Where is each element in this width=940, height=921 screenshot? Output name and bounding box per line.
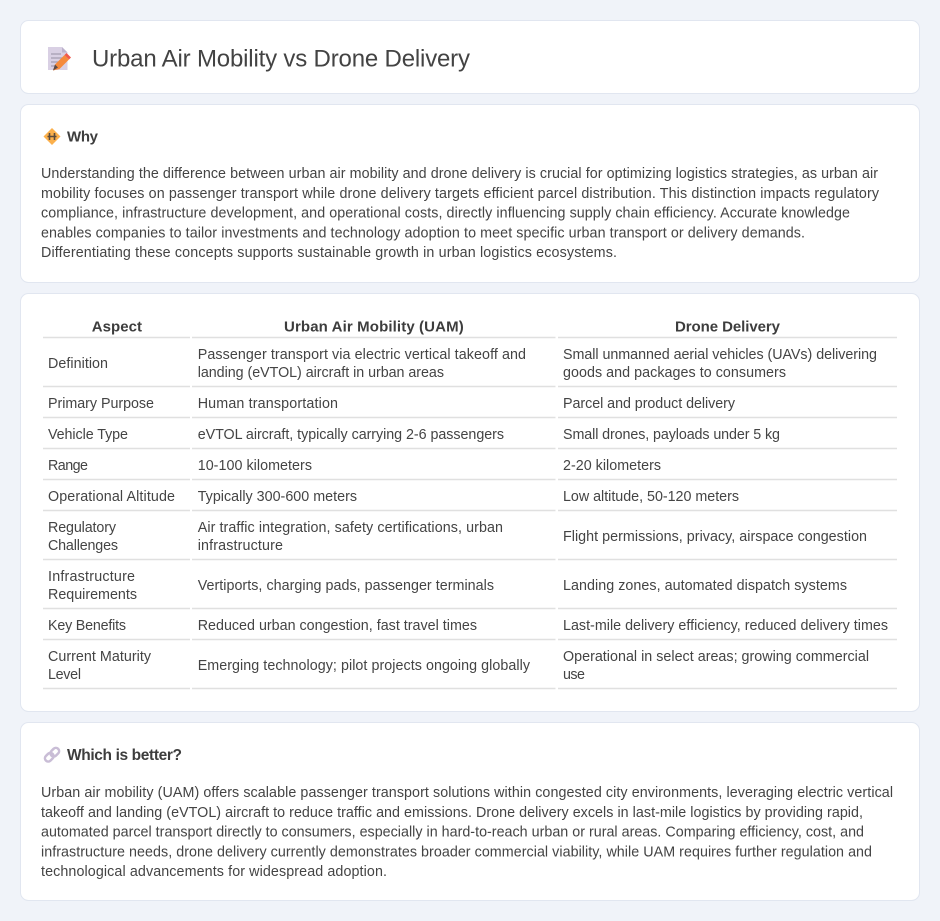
row: current maturity level: use — [563, 667, 585, 683]
text block: why: Differentiating these concepts supports sustainable growth in urban logistics ecosystems. — [41, 245, 617, 261]
row: current maturity level: Operational in select areas; growing commercial — [563, 649, 869, 665]
icon: warning diamond — [44, 128, 60, 145]
row: current maturity level: Emerging technology; pilot projects ongoing globally — [198, 658, 531, 674]
row: key benefits: Key Benefits — [48, 618, 126, 634]
row: infrastructure requirements: Infrastructure — [48, 569, 135, 585]
text block: which is better: Urban air mobility (UAM) offers scalable passenger transport solutions within congested city environments, leveraging electric vertical — [41, 785, 893, 801]
row: regulatory challenges: Air traffic integration, safety certifications, urban — [198, 520, 503, 536]
row: operational altitude: Low altitude, 50-120 meters — [563, 489, 739, 505]
panel: comparison table — [20, 294, 920, 712]
row: regulatory challenges: Challenges — [48, 538, 118, 554]
row: key benefits: Last-mile delivery efficiency, reduced delivery times — [563, 618, 888, 634]
row: range — [48, 458, 661, 474]
row: infrastructure requirements: Landing zones, automated dispatch systems — [563, 578, 847, 594]
row: regulatory challenges: infrastructure — [198, 538, 283, 554]
row: primary purpose: Primary Purpose — [48, 396, 154, 412]
row: infrastructure requirements: Vertiports, charging pads, passenger terminals — [198, 578, 494, 594]
text block: which is better: technological advancements for widespread adoption. — [41, 864, 387, 880]
row: definition: goods and packages to consumers — [563, 365, 786, 381]
row: vehicle type: Small drones, payloads under 5 kg — [563, 427, 780, 443]
row: definition: Small unmanned aerial vehicles (UAVs) delivering — [563, 347, 877, 363]
row: current maturity level — [48, 649, 869, 683]
panel: why — [20, 104, 920, 282]
row: range: 10-100 kilometers — [198, 458, 312, 474]
row: infrastructure requirements — [48, 569, 847, 603]
table header: Urban Air Mobility (UAM) — [284, 318, 464, 336]
icon: link — [44, 747, 60, 763]
row: regulatory challenges — [48, 520, 867, 554]
icon: memo with pencil — [48, 47, 71, 70]
row: operational altitude: Operational Altitude — [48, 489, 175, 505]
panel: which is better — [20, 722, 920, 900]
row: vehicle type: Vehicle Type — [48, 427, 128, 443]
row: primary purpose — [48, 396, 736, 412]
text block: which is better: automated parcel transport directly to consumers, especially in hard-to-reach urban or rural areas. Comparing efficiency, cost, and — [41, 825, 864, 841]
row: current maturity level: Level — [48, 667, 81, 683]
text block: why: enables companies to tailor investments and technology adoption to meet specific urban transport or delivery demands. — [41, 225, 805, 241]
heading: why: Why — [67, 128, 99, 146]
row: range: Range — [48, 458, 88, 474]
row: definition: landing (eVTOL) aircraft in urban areas — [198, 365, 444, 381]
row: key benefits: Reduced urban congestion, fast travel times — [198, 618, 477, 634]
text block: why: Understanding the difference between urban air mobility and drone delivery is crucial for optimizing logistics strategies, as urban air — [41, 166, 878, 182]
table header: Drone Delivery — [675, 318, 781, 336]
row: infrastructure requirements: Requirements — [48, 587, 137, 603]
text block: which is better — [41, 785, 893, 880]
table header: Aspect — [92, 318, 142, 336]
row: regulatory challenges: Regulatory — [48, 520, 117, 536]
row: vehicle type: eVTOL aircraft, typically carrying 2-6 passengers — [198, 427, 504, 443]
row: regulatory challenges: Flight permissions, privacy, airspace congestion — [563, 529, 867, 545]
title: Urban Air Mobility vs Drone Delivery — [92, 46, 470, 72]
table header — [92, 318, 781, 336]
text block: why: mobility focuses on passenger transport while drone delivery targets efficient parcel distribution. This distinction impacts regulatory — [41, 186, 880, 202]
row: definition — [48, 347, 877, 381]
row: current maturity level: Current Maturity — [48, 649, 152, 665]
row: operational altitude: Typically 300-600 meters — [198, 489, 357, 505]
panel: title card — [20, 20, 920, 94]
row: vehicle type — [48, 427, 780, 443]
row: range: 2-20 kilometers — [563, 458, 661, 474]
row: definition: Definition — [48, 356, 108, 372]
row: primary purpose: Human transportation — [198, 396, 338, 412]
text block: why: compliance, infrastructure development, and operational costs, directly influencing supply chain efficiency. Accurate knowledge — [41, 206, 850, 222]
text block: which is better: takeoff and landing (eVTOL) aircraft to reduce traffic and emissions. Drone delivery excels in last-mile logistics by providing rapid, — [41, 805, 863, 821]
row: primary purpose: Parcel and product delivery — [563, 396, 736, 412]
row: operational altitude — [48, 489, 739, 505]
row: key benefits — [48, 618, 888, 634]
text block: why — [41, 166, 880, 261]
heading: which is better: Which is better? — [67, 747, 182, 764]
row: definition: Passenger transport via electric vertical takeoff and — [198, 347, 526, 363]
text block: which is better: infrastructure needs, drone delivery currently demonstrates broader commercial viability, while UAM requires further regulation and — [41, 844, 872, 860]
